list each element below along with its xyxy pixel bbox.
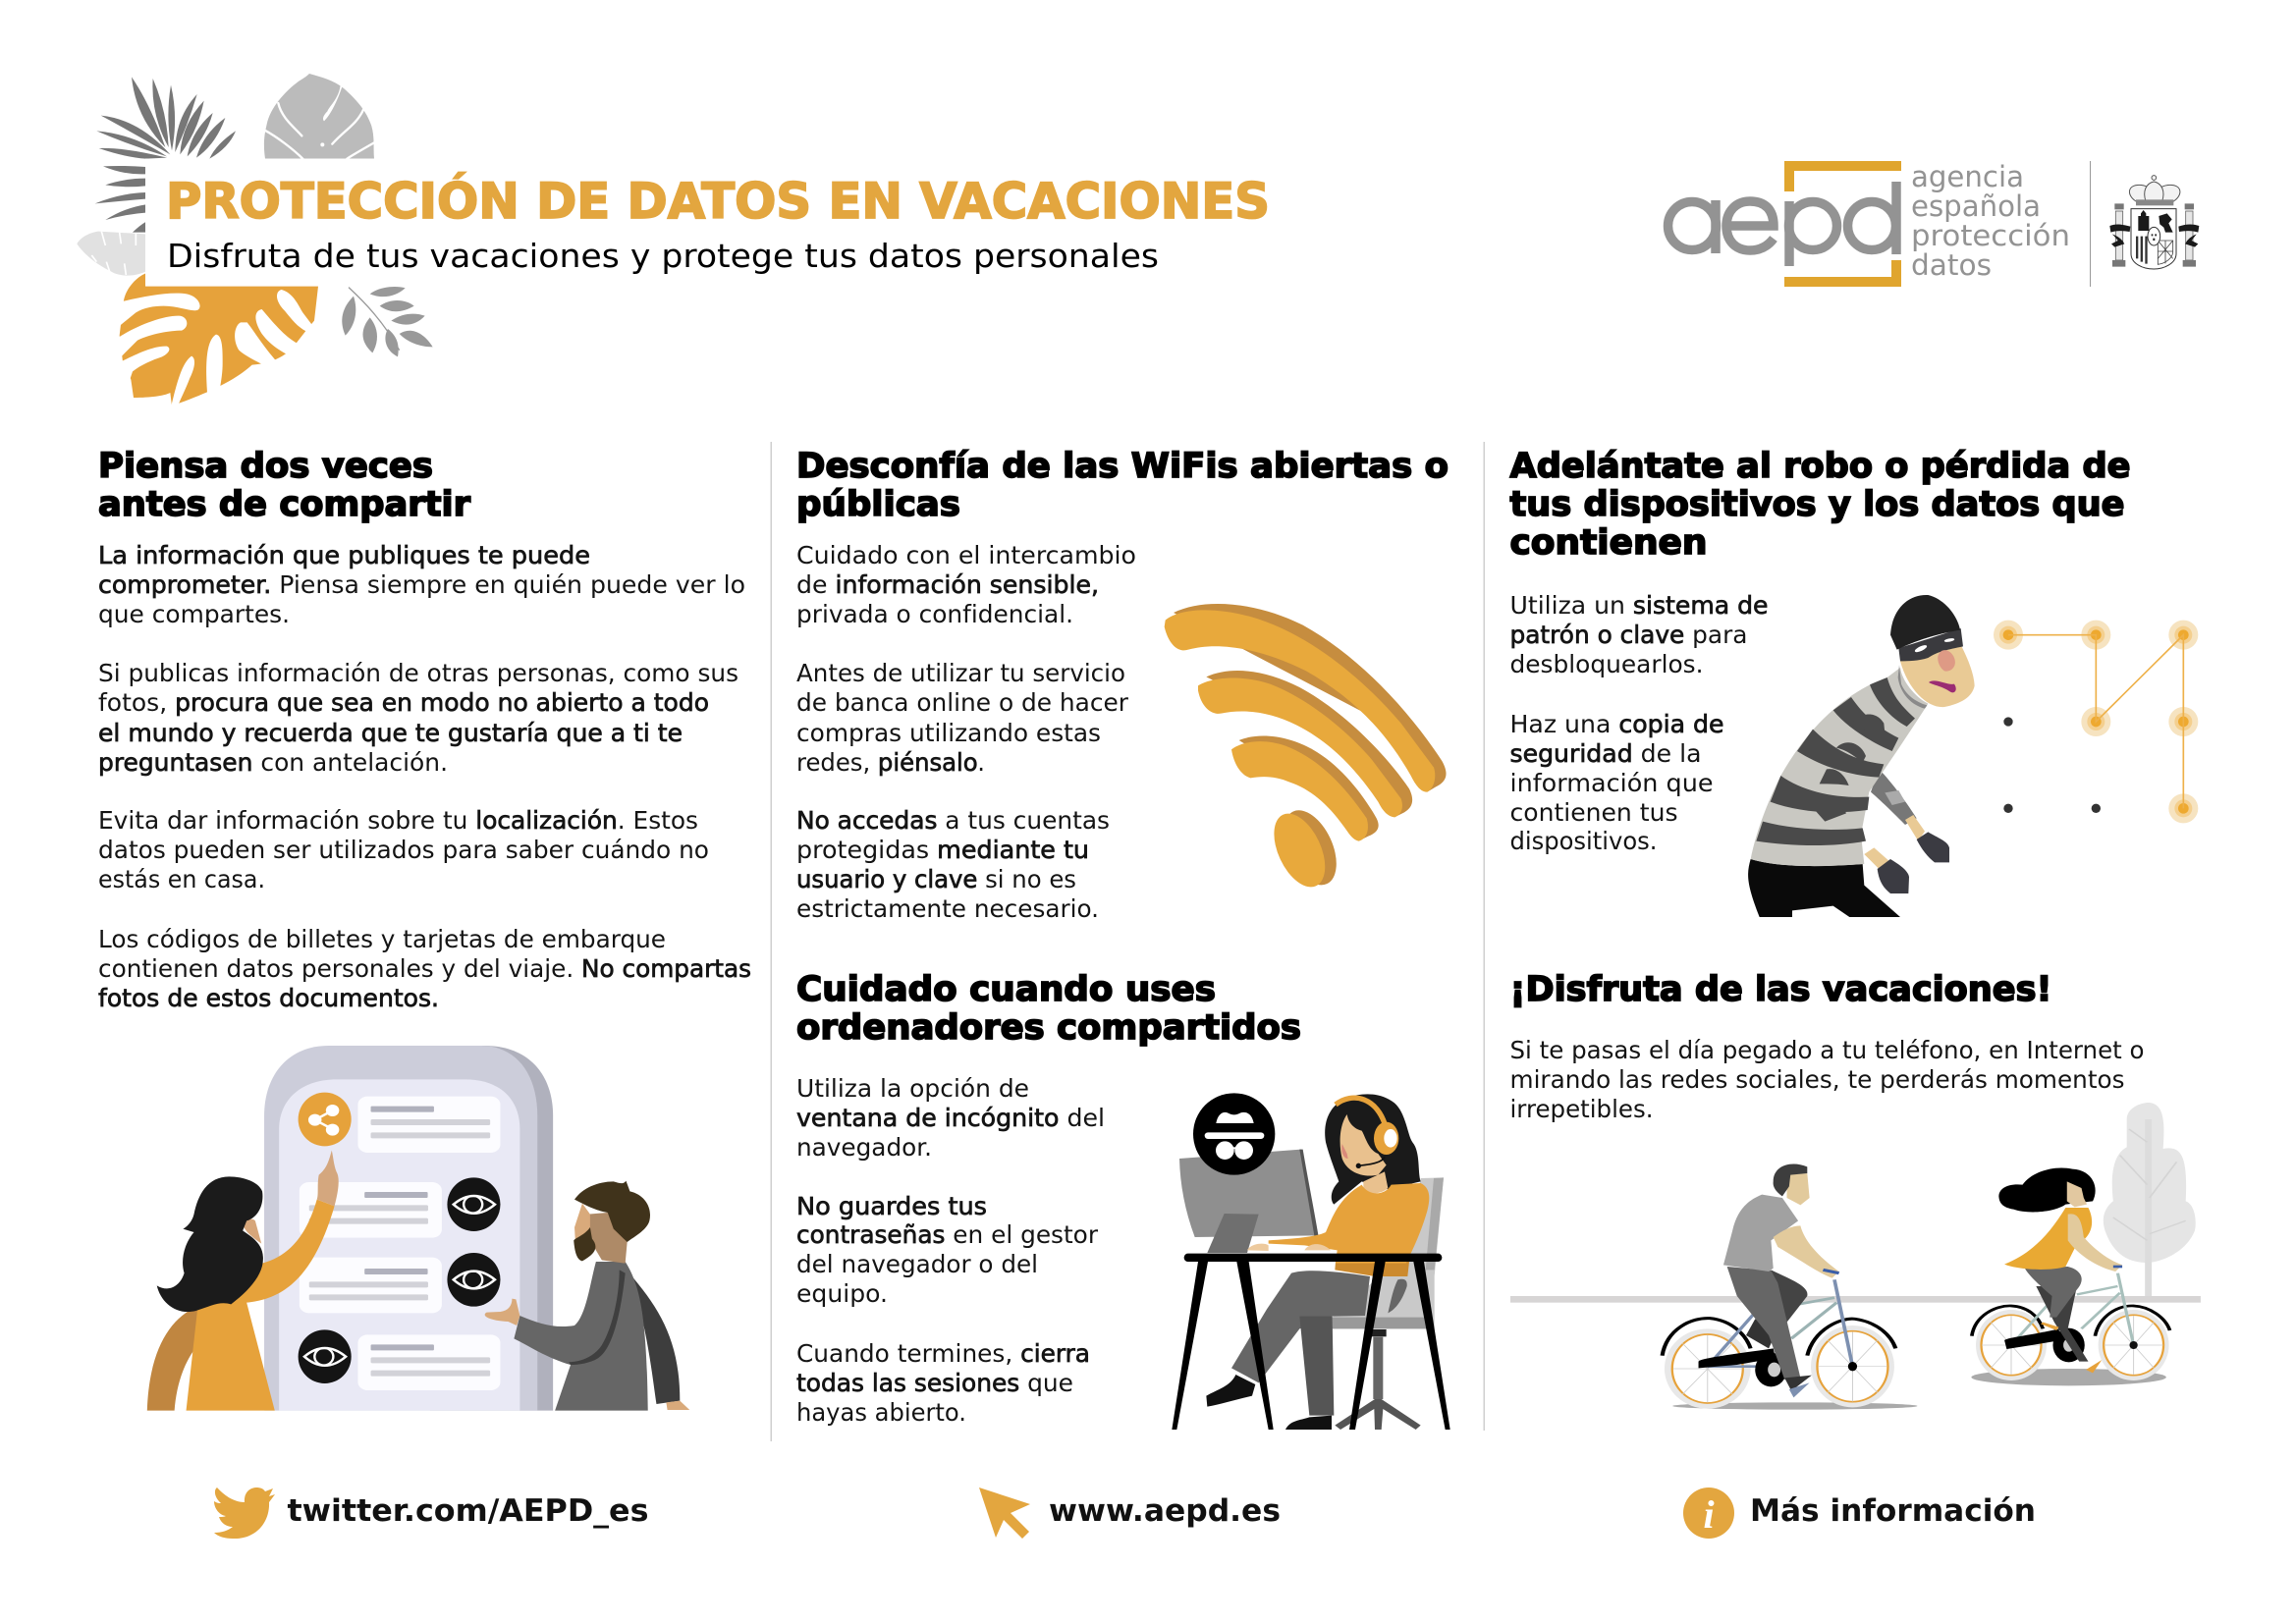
- heading: [1510, 447, 2131, 563]
- logo wordmark: datos: [1911, 248, 1992, 282]
- heading: tus dispositivos y los datos que: [1510, 485, 2125, 524]
- heading: Piensa dos veces: [98, 447, 433, 486]
- heading: [796, 970, 1301, 1048]
- body text: redes, piénsalo.: [796, 748, 985, 777]
- body text: ventana de incógnito del: [796, 1104, 1105, 1132]
- body text: [796, 541, 1136, 923]
- body text: Si publicas información de otras personas, como sus: [98, 659, 738, 687]
- chair: [1333, 1177, 1444, 1430]
- body text: seguridad de la: [1510, 739, 1701, 768]
- icon: eye 1: [447, 1177, 500, 1231]
- divider 2: [1483, 442, 1485, 1431]
- illustration: cyclists: [1510, 1103, 2201, 1410]
- body text: mirando las redes sociales, te perderás momentos: [1510, 1065, 2125, 1094]
- twig: [342, 287, 433, 356]
- crown: [2129, 176, 2180, 201]
- body text: que compartes.: [98, 600, 290, 628]
- link text: Más información: [1750, 1493, 2036, 1529]
- divider 1: [770, 442, 772, 1441]
- man: [485, 1181, 689, 1411]
- body text: Utiliza un sistema de: [1510, 591, 1768, 620]
- logo wordmark: española: [1911, 189, 2041, 223]
- panel: piensa dos veces: [98, 447, 751, 1411]
- grey monstera leaf: [264, 74, 375, 159]
- body text: usuario y clave si no es: [796, 865, 1076, 893]
- title block: [145, 159, 1285, 287]
- body text: [98, 541, 751, 1012]
- body text: navegador.: [796, 1133, 932, 1162]
- coat of arms: [2109, 176, 2199, 269]
- decorative leaves behind the title: [77, 74, 433, 409]
- body text: protegidas mediante tu: [796, 836, 1089, 864]
- body text: compras utilizando estas: [796, 719, 1101, 747]
- body text: Cuando termines, cierra: [796, 1339, 1090, 1368]
- phone: [264, 1046, 553, 1411]
- body text: Antes de utilizar tu servicio: [796, 659, 1125, 687]
- heading: Adelántate al robo o pérdida de: [1510, 447, 2131, 486]
- body text: [1510, 591, 1768, 855]
- icon: info: [1683, 1488, 1734, 1539]
- body text: de banca online o de hacer: [796, 688, 1129, 717]
- logo wordmark: [1911, 160, 2070, 282]
- body text: contienen datos personales y del viaje. No compartas: [98, 954, 751, 983]
- heading: antes de compartir: [98, 485, 471, 524]
- tree: [2104, 1103, 2196, 1296]
- body text: contraseñas en el gestor: [796, 1220, 1099, 1249]
- body text: Utiliza la opción de: [796, 1074, 1029, 1103]
- link text: www.aepd.es: [1049, 1493, 1281, 1529]
- body text: información que: [1510, 769, 1713, 797]
- body text: preguntasen con antelación.: [98, 748, 448, 777]
- logo letters aepd: [1667, 182, 1896, 266]
- body text: Los códigos de billetes y tarjetas de embarque: [98, 925, 666, 953]
- shield: [2131, 209, 2176, 269]
- link text: twitter.com/AEPD_es: [287, 1493, 648, 1529]
- body text: fotos de estos documentos.: [98, 984, 439, 1012]
- light leaf: [77, 232, 145, 276]
- thief: [1748, 595, 1975, 917]
- body text: fotos, procura que sea en modo no abierto a todo: [98, 688, 709, 717]
- body text: privada o confidencial.: [796, 600, 1073, 628]
- icon: eye 2: [447, 1253, 500, 1307]
- man cycling: [1663, 1163, 1917, 1410]
- heading: públicas: [796, 485, 960, 524]
- heading: ordenadores compartidos: [796, 1008, 1301, 1048]
- woman: [1206, 1094, 1429, 1430]
- body text: datos pueden ser utilizados para saber cuándo no: [98, 836, 709, 864]
- woman: [147, 1151, 339, 1411]
- footer link: more information: [1683, 1488, 2036, 1539]
- columns: [2115, 211, 2193, 260]
- body text: Evita dar información sobre tu localización. Estos: [98, 806, 698, 835]
- body text: [796, 1074, 1105, 1427]
- icon: cursor arrow: [979, 1488, 1030, 1539]
- body text: estás en casa.: [98, 865, 265, 893]
- body text: Cuidado con el intercambio: [796, 541, 1136, 569]
- body text: [1510, 1036, 2145, 1123]
- body text: patrón o clave para: [1510, 621, 1748, 649]
- body text: todas las sesiones que: [796, 1369, 1073, 1397]
- illustration: woman at computer: [1172, 1093, 1450, 1430]
- body text: La información que publiques te puede: [98, 541, 590, 569]
- body text: Si te pasas el día pegado a tu teléfono, en Internet o: [1510, 1036, 2145, 1064]
- body text: de información sensible,: [796, 570, 1099, 599]
- icon: incognito: [1193, 1093, 1275, 1175]
- heading: ¡Disfruta de las vacaciones!: [1510, 970, 2052, 1009]
- body text: No accedas a tus cuentas: [796, 806, 1110, 835]
- icon: wifi: [1165, 604, 1447, 894]
- icon: share: [299, 1093, 352, 1146]
- woman cycling: [1971, 1168, 2170, 1385]
- body text: comprometer. Piensa siempre en quién puede ver lo: [98, 570, 745, 599]
- logo wordmark: protección: [1911, 219, 2070, 252]
- ribbons: [2109, 224, 2199, 247]
- icon: info: i: [1703, 1492, 1715, 1537]
- body text: estrictamente necesario.: [796, 894, 1099, 923]
- subtitle: Disfruta de tus vacaciones y protege tus datos personales: [167, 237, 1159, 275]
- footer link: twitter: [214, 1488, 648, 1539]
- body text: irrepetibles.: [1510, 1095, 1654, 1123]
- footer link: web: [979, 1488, 1281, 1539]
- icon: twitter bird: [214, 1488, 275, 1539]
- illustration: people and phone: [147, 1046, 689, 1411]
- logo wordmark: agencia: [1911, 160, 2024, 193]
- body text: desbloquearlos.: [1510, 650, 1703, 678]
- panel: wifi: [796, 447, 1449, 923]
- orange monstera leaf: [118, 273, 318, 409]
- desk: [1172, 1254, 1450, 1430]
- body text: el mundo y recuerda que te gustaría que a ti te: [98, 719, 683, 747]
- logo bracket: [1784, 161, 1901, 287]
- heading: contienen: [1510, 523, 1707, 563]
- panel: disfruta de las vacaciones: [1510, 970, 2201, 1410]
- road: [1510, 1296, 2201, 1303]
- heading: [98, 447, 471, 524]
- monitor: [1179, 1150, 1319, 1253]
- body text: Haz una copia de: [1510, 710, 1724, 738]
- panel: ordenadores compartidos: [796, 970, 1450, 1430]
- body text: No guardes tus: [796, 1192, 987, 1220]
- unlock pattern: [1994, 621, 2198, 823]
- panel: robo o perdida: [1510, 447, 2198, 917]
- main title: PROTECCIÓN DE DATOS EN VACACIONES: [166, 172, 1270, 230]
- body text: dispositivos.: [1510, 827, 1658, 855]
- palm leaf: [95, 77, 236, 233]
- illustration: thief and unlock pattern: [1748, 595, 2198, 917]
- icon: eye 3: [299, 1329, 352, 1383]
- heading: Desconfía de las WiFis abiertas o: [796, 447, 1449, 486]
- body text: hayas abierto.: [796, 1398, 966, 1427]
- heading: [796, 447, 1449, 524]
- body text: equipo.: [796, 1279, 888, 1308]
- body text: del navegador o del: [796, 1250, 1038, 1278]
- AEPD logo: [1667, 160, 2199, 287]
- body text: contienen tus: [1510, 798, 1677, 827]
- heading: Cuidado cuando uses: [796, 970, 1216, 1009]
